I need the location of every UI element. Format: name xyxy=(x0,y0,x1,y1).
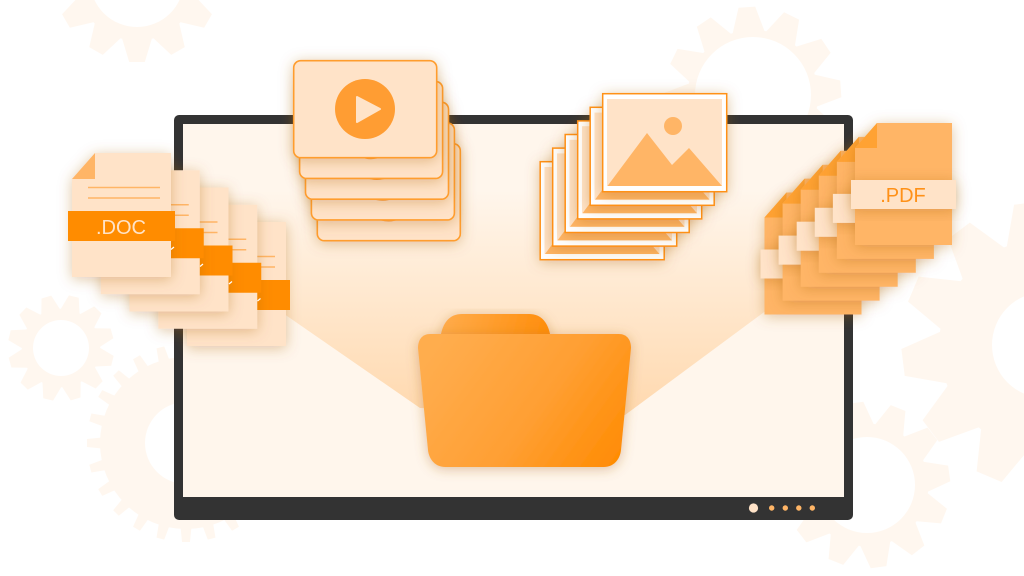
icon: play button circle xyxy=(335,79,395,139)
gear: top left xyxy=(55,0,219,62)
folder body xyxy=(418,334,631,467)
folder xyxy=(418,314,631,467)
DOC file stack xyxy=(68,153,290,346)
indicator dots xyxy=(749,503,815,513)
gear: large right xyxy=(886,186,1024,504)
image file stack xyxy=(540,94,727,260)
monitor xyxy=(174,115,853,520)
monitor frame xyxy=(174,115,853,520)
gear: top right xyxy=(659,1,847,189)
label: .PDF: .PDF xyxy=(880,185,926,207)
gear: large lower left xyxy=(87,344,285,542)
light beam from folder xyxy=(183,124,844,415)
gear: lower right xyxy=(773,391,961,576)
PDF file stack xyxy=(760,123,956,314)
video file stack xyxy=(294,61,460,241)
icon: play triangle xyxy=(357,97,380,122)
label: .DOC: .DOC xyxy=(96,217,146,239)
monitor screen xyxy=(183,124,844,497)
gear: small left xyxy=(0,284,125,412)
folder tab xyxy=(440,314,551,340)
